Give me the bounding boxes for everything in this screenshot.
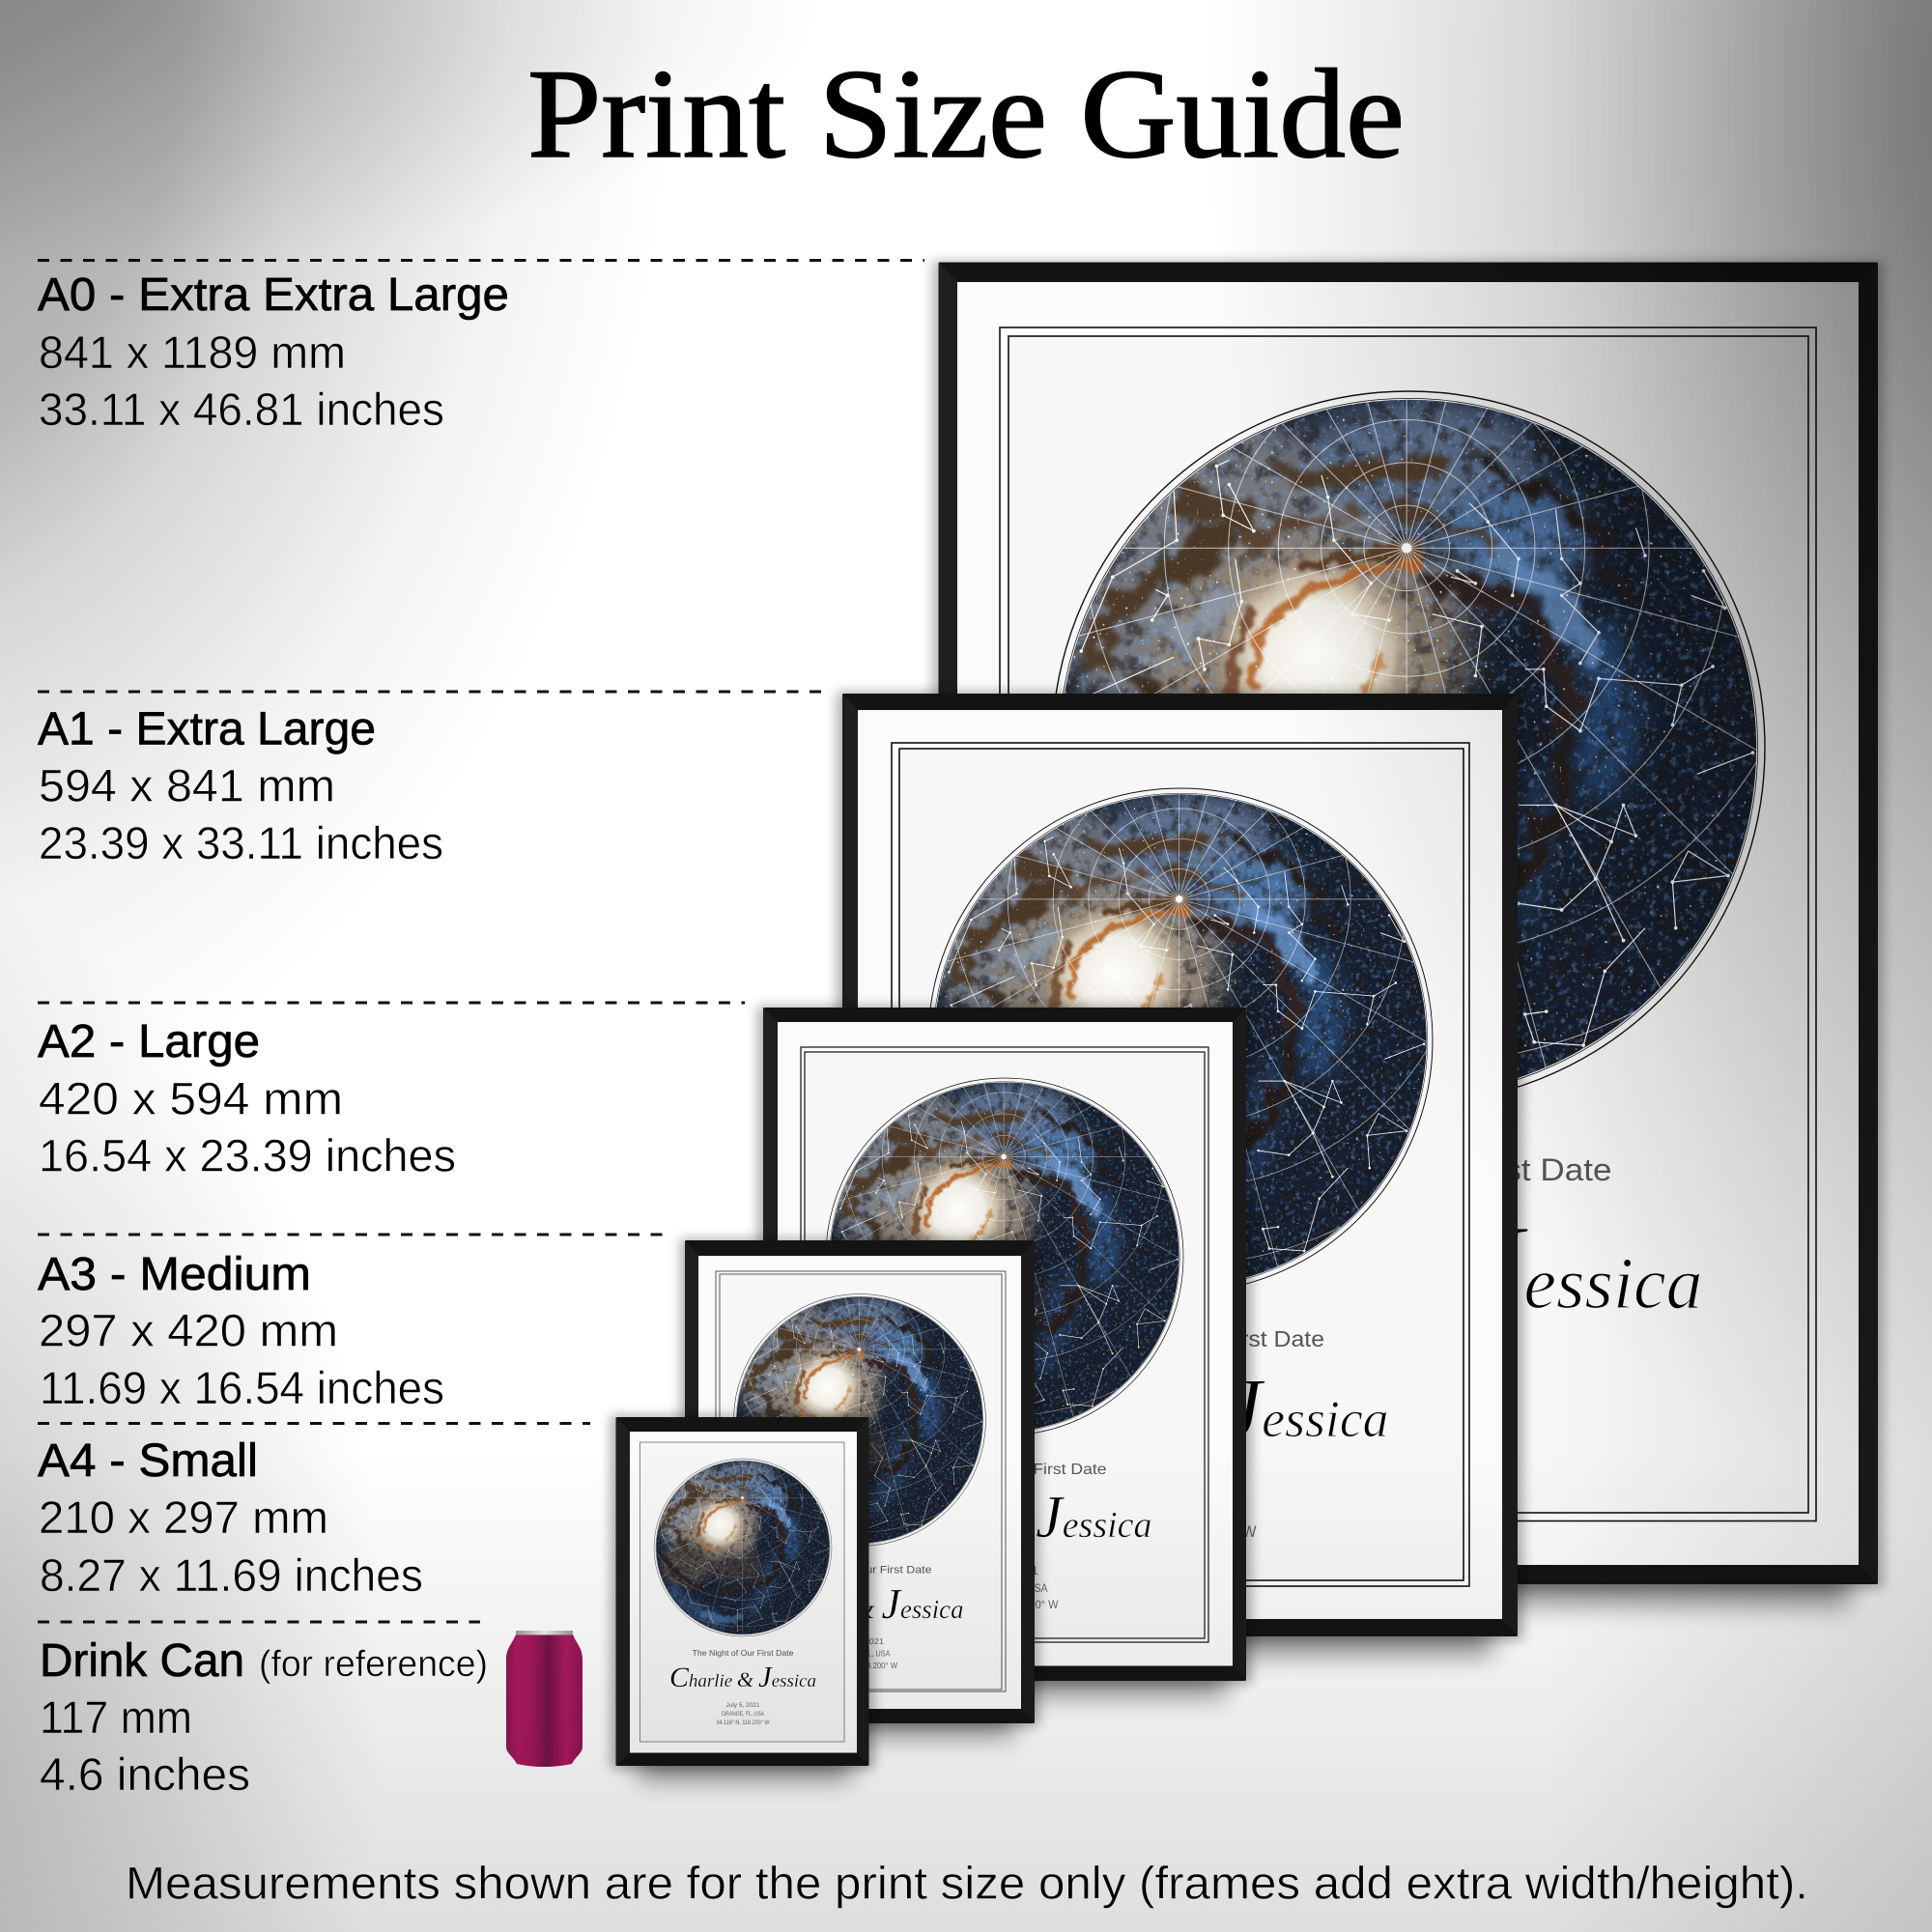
galaxy star map A3 — [582, 1072, 1136, 1627]
size label: drink can: (for reference) — [259, 1644, 488, 1685]
galaxy star map A4 — [547, 1302, 938, 1693]
footer note: Measurements shown are for the print size only (frames add extra width/height). — [126, 1857, 1808, 1909]
frame: A2 print — [611, 763, 1397, 1696]
poster text A0: Charlie & Jessica — [1115, 1202, 1702, 1335]
size label: A0: 841 x 1189 mm — [39, 327, 346, 378]
poster text A3: Charlie & Jessica — [755, 1580, 963, 1628]
galaxy star map A2 — [611, 763, 1397, 1549]
poster text A1: ORANGE, FL, USA — [1121, 1498, 1241, 1517]
poster text A1 — [972, 1326, 1389, 1541]
poster text A4: 34.118° N, 118.200° W — [717, 1720, 770, 1726]
size label: A0: A0 - Extra Extra Large — [38, 270, 509, 321]
icon: drink can — [506, 1631, 582, 1767]
poster text A0 — [1115, 1152, 1702, 1456]
poster text A1: 34.118° N, 118.200° W — [1105, 1522, 1256, 1541]
poster text A4 — [669, 1649, 816, 1726]
size label: A3: 297 x 420 mm — [39, 1304, 338, 1356]
frame: A1 print — [624, 345, 1734, 1656]
size label: A3: 11.69 x 16.54 inches — [40, 1362, 444, 1413]
size label: A2: 16.54 x 23.39 inches — [39, 1130, 456, 1180]
poster text A4: July 5, 2021 — [726, 1703, 760, 1709]
poster text A3: July 5, 2021 — [836, 1636, 884, 1646]
poster text A0: July 5, 2021 — [1341, 1362, 1476, 1388]
poster text A2: 34.118° N, 118.200° W — [951, 1598, 1059, 1611]
poster text A2 — [858, 1462, 1151, 1611]
size label: A2: 420 x 594 mm — [39, 1072, 343, 1124]
poster text A3: The Night of Our First Date — [788, 1565, 931, 1577]
poster text A1: The Night of Our First Date — [1037, 1326, 1324, 1351]
poster text A2: ORANGE, FL, USA — [962, 1581, 1047, 1595]
size label: A4 — [38, 1424, 590, 1601]
poster text A3: 34.118° N, 118.200° W — [822, 1661, 897, 1670]
size label: A4: 8.27 x 11.69 inches — [40, 1549, 423, 1601]
poster text A1: Charlie & Jessica — [972, 1362, 1389, 1456]
size label: A2 — [38, 1003, 745, 1180]
frame: A0 print — [622, 0, 1932, 1605]
poster text A1: July 5, 2021 — [1132, 1474, 1229, 1492]
size label: A4: 210 x 297 mm — [39, 1492, 328, 1543]
poster text A2: July 5, 2021 — [971, 1564, 1038, 1577]
poster text A0: The Night of Our First Date — [1206, 1152, 1611, 1187]
poster text A4: Charlie & Jessica — [669, 1660, 816, 1693]
size label: A4: A4 - Small — [38, 1435, 258, 1487]
size label: A1 — [38, 692, 823, 868]
poster text A0: ORANGE, FL, USA — [1323, 1396, 1493, 1422]
poster text A4: ORANGE, FL, USA — [722, 1712, 764, 1718]
poster text A3 — [755, 1565, 963, 1670]
size label: drink can: 4.6 inches — [40, 1748, 250, 1800]
size label: drink can: Drink Can — [40, 1635, 244, 1687]
poster text A0: 34.118° N, 118.200° W — [1302, 1430, 1516, 1456]
size label: A1: A1 - Extra Large — [38, 703, 376, 755]
size label: A0 — [38, 261, 924, 435]
size label: A1: 594 x 841 mm — [39, 759, 335, 811]
size label: A2: A2 - Large — [38, 1016, 260, 1067]
size label: A3 — [38, 1235, 666, 1413]
size label: A1: 23.39 x 33.11 inches — [39, 817, 443, 868]
poster text A3: ORANGE, FL, USA — [829, 1649, 891, 1659]
size label: drink can: 117 mm — [40, 1691, 192, 1743]
size label: drink can — [38, 1622, 488, 1800]
frame: A4 print — [547, 1302, 938, 1779]
size label: A0: 33.11 x 46.81 inches — [39, 384, 444, 435]
poster text A4: The Night of Our First Date — [692, 1649, 794, 1658]
galaxy star map A0 — [622, 0, 1932, 1332]
frame: A3 print — [582, 1072, 1136, 1737]
poster text A2: Charlie & Jessica — [858, 1485, 1151, 1550]
poster text A2: The Night of Our First Date — [902, 1462, 1107, 1478]
size label: A3: A3 - Medium — [38, 1249, 311, 1300]
galaxy star map A1 — [624, 345, 1734, 1454]
title: Print Size Guide — [527, 43, 1405, 185]
